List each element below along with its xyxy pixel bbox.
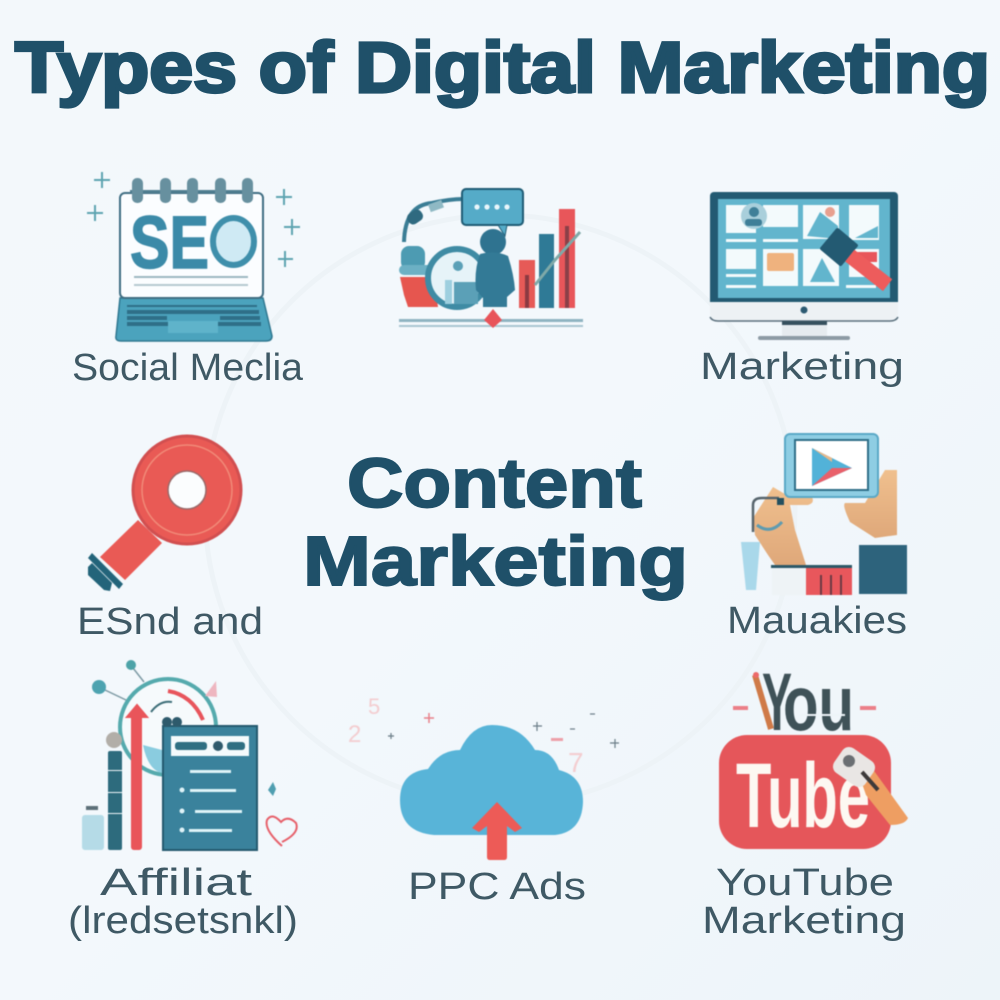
icon: analytics person — [399, 189, 583, 328]
icon: affiliate dashboard — [82, 660, 297, 850]
icon: YouTube logo: ou — [783, 659, 854, 747]
heading: Content Marketing: Marketing — [303, 522, 688, 600]
icon: video tablet with hands — [741, 434, 907, 595]
label: YouTube: YouTube — [716, 862, 894, 904]
label: Marketing bottom right: Marketing — [702, 900, 906, 942]
icon: YouTube logo: Tube — [736, 745, 870, 847]
icon: SEO laptop — [87, 172, 300, 341]
icon: cloud upload: 5 — [368, 694, 380, 719]
label: Mauakies: Mauakies — [727, 600, 907, 642]
label: Affiliat: Affiliat — [100, 862, 253, 904]
label: ESnd and: ESnd and — [77, 601, 263, 643]
icon: cloud upload — [348, 694, 619, 860]
title: Types of Digital Marketing — [15, 29, 990, 108]
icon: cloud upload: 7 — [568, 747, 584, 778]
icon: cloud upload: 2 — [348, 721, 361, 748]
label: Social Media: Social Meclia — [72, 347, 304, 389]
heading: Content Marketing: Content — [347, 444, 642, 522]
icon: YouTube logo: Y — [762, 657, 792, 748]
icon: YouTube logo — [719, 657, 908, 849]
label: lredsetsnkl: (lredsetsnkl) — [68, 900, 298, 942]
icon: red magnifier — [88, 436, 241, 591]
label: Marketing top right: Marketing — [700, 346, 904, 388]
heading: Content Marketing — [303, 444, 688, 600]
label: PPC Ads: PPC Ads — [408, 866, 586, 908]
icon: monitor — [710, 192, 898, 340]
icon: SEO laptop: SE — [130, 201, 209, 284]
